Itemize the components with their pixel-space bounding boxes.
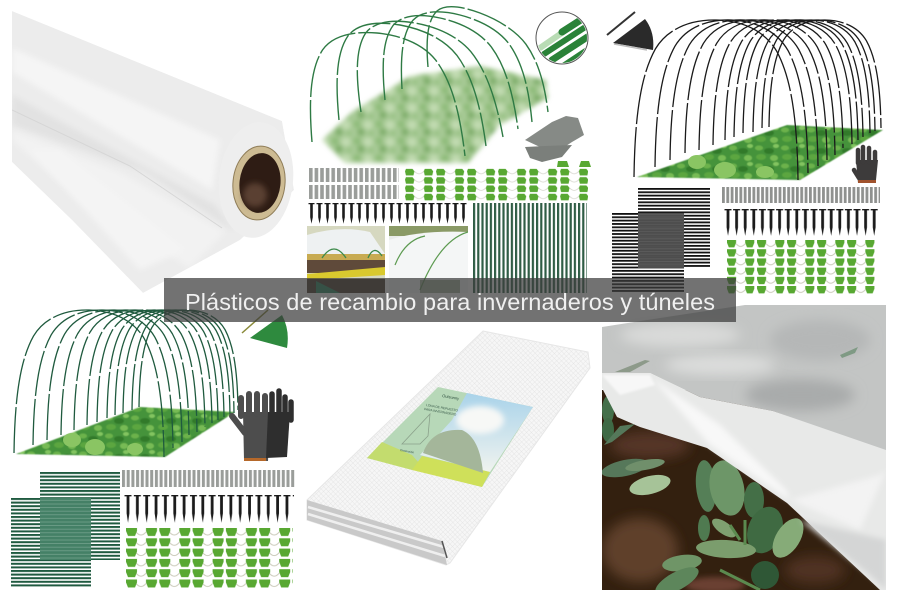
grey screws [722, 187, 880, 203]
photo: raised bed tunnels [307, 226, 385, 293]
photo: white tunnel [389, 226, 468, 293]
icon: work gloves [232, 391, 291, 461]
grey fleece background [602, 305, 886, 452]
stripes: rods bundle back [638, 188, 710, 268]
panel: folded white reinforced sheet [307, 331, 590, 565]
product label [367, 387, 533, 487]
title banner [164, 278, 736, 322]
green rods [473, 203, 587, 293]
stripes: rods bundle back [40, 472, 120, 560]
soil [602, 390, 886, 593]
roll end [213, 118, 299, 242]
black hoops [634, 16, 881, 180]
lettuce bed [637, 125, 883, 180]
panel: dark green hoop kit with gloves [11, 308, 295, 588]
icon: black glove [854, 147, 878, 183]
green clips [727, 240, 877, 295]
icon: rods sample [607, 12, 653, 50]
plants [322, 66, 548, 163]
green clips [405, 168, 588, 201]
white fleece flap [602, 373, 886, 590]
black stakes [724, 209, 879, 237]
icon: green rods sample [242, 310, 288, 348]
icon: rods inset circle [536, 12, 588, 64]
product label: Dimensión [400, 448, 415, 455]
icon: grey gloves [525, 116, 584, 162]
spinach plant centre [655, 460, 804, 590]
stripes: rods bundle front [11, 498, 91, 587]
product label: PARA INVERNADERO [424, 407, 457, 417]
black stakes [124, 495, 294, 524]
green clips [126, 528, 293, 588]
black stakes [308, 203, 468, 224]
panel: black hoop kit with lettuce [607, 12, 883, 295]
panel: green hoop kit with plants [300, 0, 594, 293]
side folds [307, 500, 447, 565]
product label: LONA DE REPUESTO [426, 403, 459, 413]
sheet body [307, 331, 590, 565]
product label: Outsunny [442, 393, 460, 401]
clips top row [557, 161, 591, 167]
film sheet [12, 11, 294, 293]
lettuce bed [16, 407, 235, 457]
stripes: rods bundle front [612, 213, 684, 293]
dark green hoops [14, 308, 238, 457]
grey screws [309, 168, 399, 199]
title: Plásticos de recambio para invernaderos y túneles [185, 289, 715, 315]
panel: plastic film roll [12, 11, 299, 293]
green hoops [300, 0, 548, 156]
spinach plants left [600, 396, 673, 499]
panel: fleece cover over spinach [600, 305, 886, 600]
grey screws [122, 470, 295, 487]
